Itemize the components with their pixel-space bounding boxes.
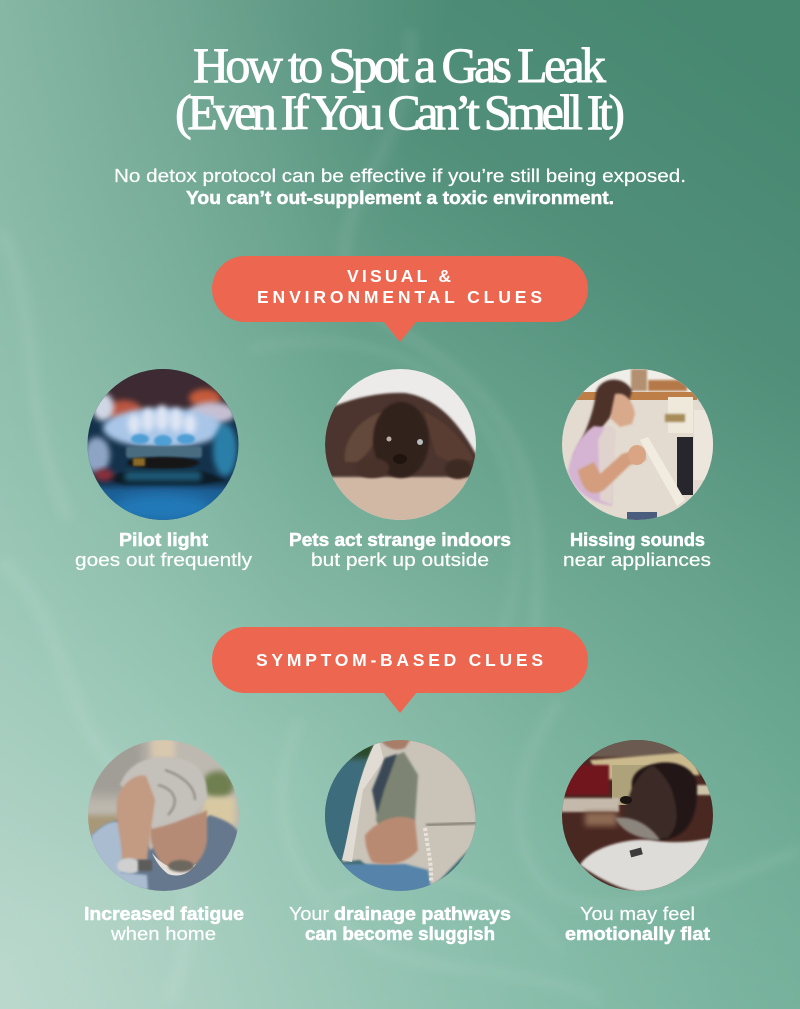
title: How to Spot a Gas Leak <box>193 37 606 93</box>
photo: man with headache <box>85 737 242 895</box>
banner: visual and environmental clues <box>212 256 588 342</box>
title <box>175 37 625 140</box>
banner: visual and environmental clues: ENVIRONMENTAL CLUES <box>257 287 542 307</box>
label: emotionally flat: You may feel <box>580 904 695 924</box>
label: drainage pathways <box>289 904 511 944</box>
photo: man lying back looking flat <box>559 737 718 894</box>
label: drainage pathways: drainage pathways <box>334 904 511 924</box>
banner: visual and environmental clues: VISUAL & <box>347 266 451 286</box>
banner: symptom-based clues <box>212 627 588 713</box>
label: increased fatigue <box>84 904 244 944</box>
intro text: You can’t out-supplement a toxic environment. <box>186 188 614 208</box>
label: drainage pathways: Your <box>289 904 329 924</box>
label: pets act strange <box>289 530 511 570</box>
label: increased fatigue: when home <box>110 924 216 944</box>
label: emotionally flat <box>565 904 710 944</box>
label: hissing sounds <box>563 530 711 570</box>
intro text <box>114 166 686 208</box>
label: increased fatigue: Increased fatigue <box>84 904 244 924</box>
label: pilot light: goes out frequently <box>75 550 252 570</box>
label: pilot light <box>75 530 252 570</box>
labels: symptom clues <box>84 904 710 944</box>
label: pilot light: Pilot light <box>119 530 208 550</box>
intro text: No detox protocol can be effective if you’re still being exposed. <box>114 166 686 186</box>
label: pets act strange: Pets act strange indoors <box>289 530 511 550</box>
labels: visual clues <box>75 530 711 570</box>
label: hissing sounds: near appliances <box>563 550 711 570</box>
label: emotionally flat: emotionally flat <box>565 924 710 944</box>
banner: symptom-based clues: SYMPTOM-BASED CLUES <box>256 650 543 670</box>
photo: sad chocolate labrador <box>322 366 479 523</box>
photo: woman holding stomach in shawl <box>322 737 479 894</box>
photo: woman checking the oven <box>559 366 716 524</box>
photo: gas burner flame <box>88 369 238 520</box>
label: pets act strange: but perk up outside <box>311 550 489 570</box>
label: drainage pathways: can become sluggish <box>305 924 495 944</box>
label: hissing sounds: Hissing sounds <box>570 530 705 550</box>
title: (Even If You Can’t Smell It) <box>175 84 625 140</box>
